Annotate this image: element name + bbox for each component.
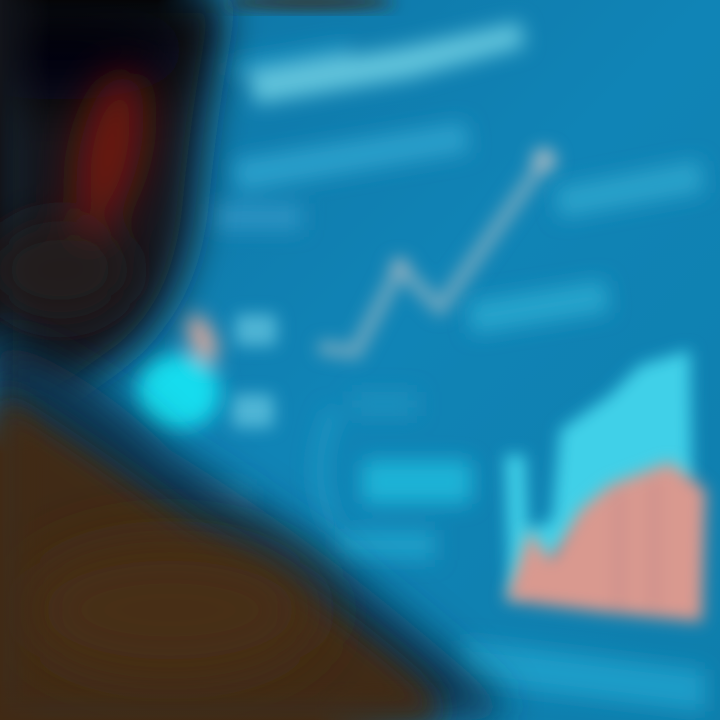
person: head silhouette [0,0,395,420]
text block: right column [468,160,704,334]
line chart [325,147,557,352]
person: dark collar shadow [0,340,500,720]
person: brown shoulder [0,395,450,720]
area chart [505,350,706,622]
panel: lower text and gauge [190,392,705,712]
icon: glowing cyan circle [136,309,224,430]
text block: subheading [212,122,470,230]
icon: small legend marks [232,314,277,428]
cyan area series [505,350,692,600]
hat brim [225,0,395,9]
person: red ear [0,66,156,320]
pink bar series [505,462,706,622]
panel: dashboard heading text [225,22,525,104]
